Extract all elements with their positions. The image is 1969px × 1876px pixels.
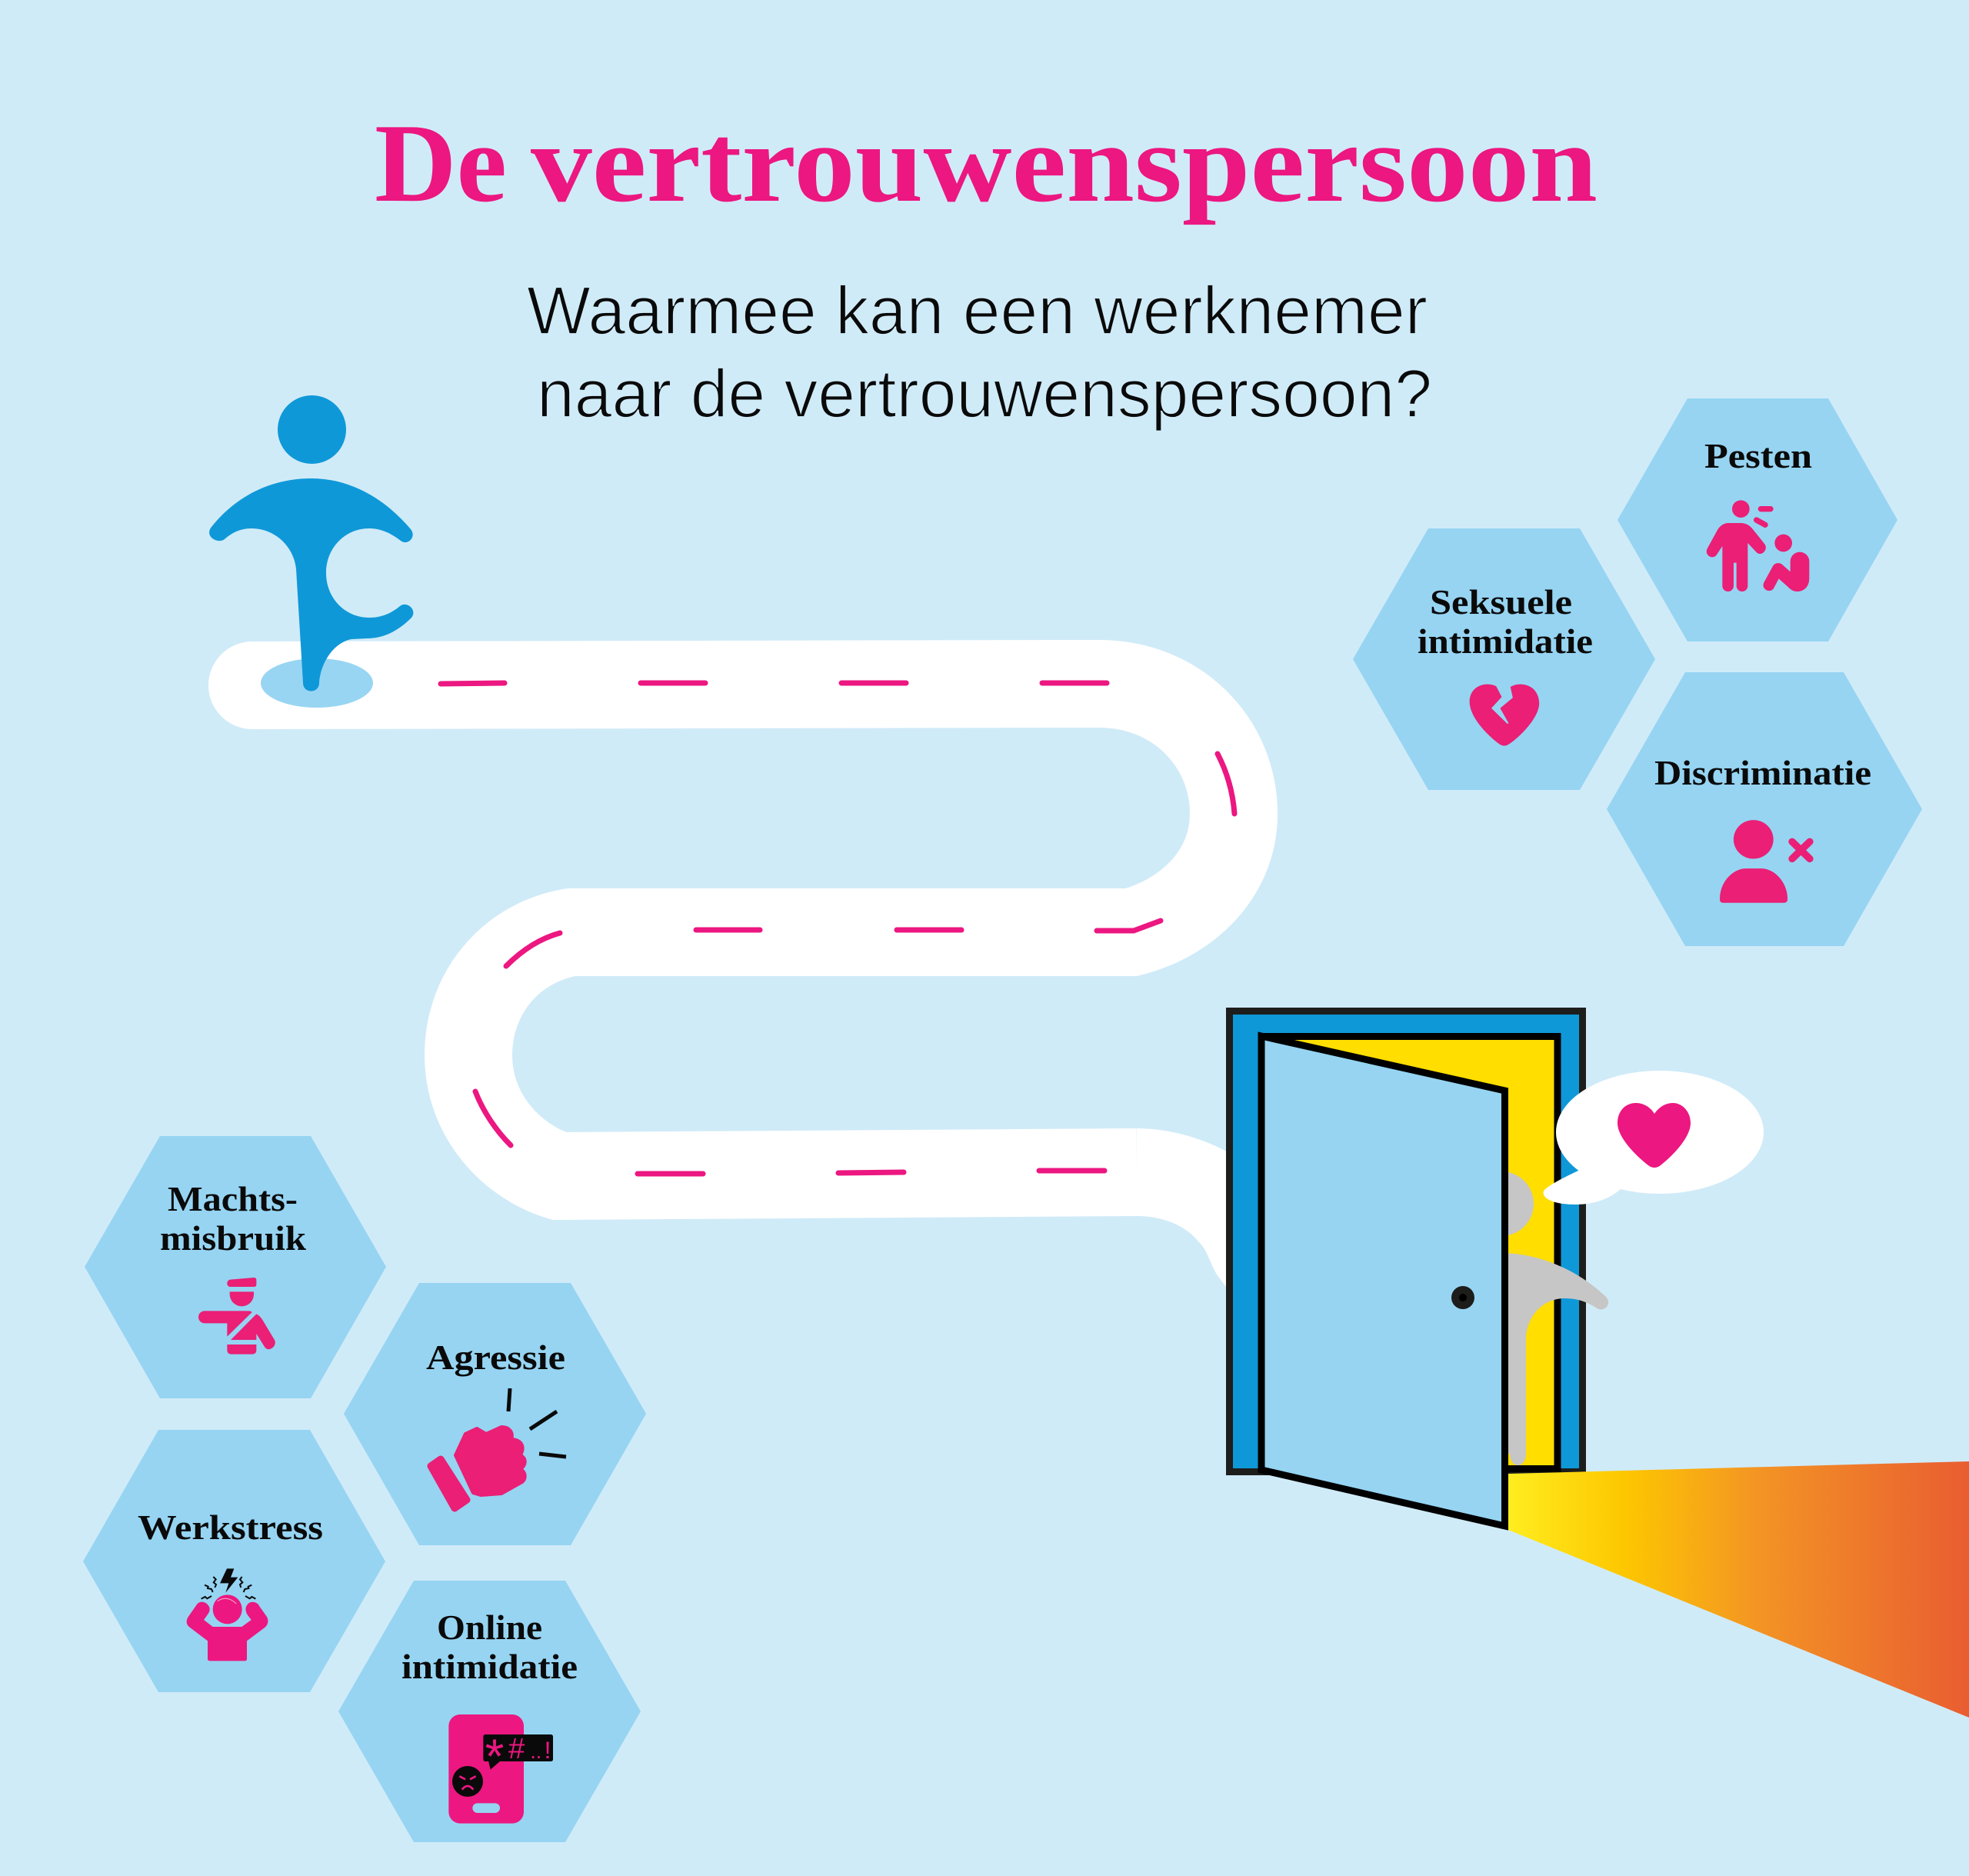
icon: phone with abusive message [448, 1714, 553, 1824]
speech bubble with heart [1544, 1071, 1764, 1205]
icon: officer pointing [198, 1278, 275, 1355]
panel: Agressie: Agressie [426, 1338, 565, 1377]
panel: Pesten [1618, 398, 1897, 641]
panel: Discriminatie [1607, 672, 1922, 946]
panel: Agressie [344, 1283, 646, 1545]
panel: Werkstress [83, 1430, 385, 1692]
panel: Online intimidatie: intimidatie [401, 1647, 578, 1686]
panel: Online intimidatie: Online [437, 1608, 542, 1647]
panel: Seksuele intimidatie [1353, 528, 1655, 790]
subtitle: Waarmee kan een werknemer [527, 272, 1428, 348]
panel: Werkstress: Werkstress [138, 1508, 323, 1547]
icon: fist [431, 1388, 566, 1508]
door frame [1229, 1011, 1583, 1472]
icon: phone with abusive message: * [485, 1730, 504, 1784]
icon: excluded person [1720, 820, 1810, 903]
panel: Seksuele intimidatie: Seksuele [1430, 582, 1572, 621]
light beam [1508, 1461, 1969, 1718]
panel: Online intimidatie [338, 1581, 641, 1842]
panel: Seksuele intimidatie: intimidatie [1418, 621, 1593, 661]
panel: Machtsmisbruik: Machts- [168, 1179, 298, 1218]
icon: phone with abusive message: ! [545, 1736, 551, 1764]
door knob [1451, 1286, 1474, 1309]
icon: phone with abusive message: # [508, 1732, 525, 1765]
start spot shadow [261, 658, 373, 708]
subtitle: naar de vertrouwenspersoon? [537, 355, 1432, 432]
icon: bullying [1707, 500, 1809, 591]
icon: blue person [209, 395, 413, 691]
grey person behind door [1469, 1171, 1608, 1465]
title: vertrouwenspersoon [531, 101, 1598, 225]
subtitle [527, 272, 1432, 432]
winding road [252, 683, 1234, 1292]
icon: heart [1618, 1103, 1691, 1168]
panel: Discriminatie: Discriminatie [1654, 753, 1871, 792]
icon: broken heart [1470, 682, 1539, 746]
icon: phone with abusive message: .. [530, 1740, 541, 1763]
panel: Pesten: Pesten [1704, 436, 1812, 475]
panel: Machtsmisbruik: misbruik [160, 1218, 306, 1258]
panel: Machtsmisbruik [85, 1136, 386, 1398]
open door [1261, 1036, 1504, 1526]
title: De [375, 101, 507, 225]
icon: stressed person [187, 1568, 268, 1661]
